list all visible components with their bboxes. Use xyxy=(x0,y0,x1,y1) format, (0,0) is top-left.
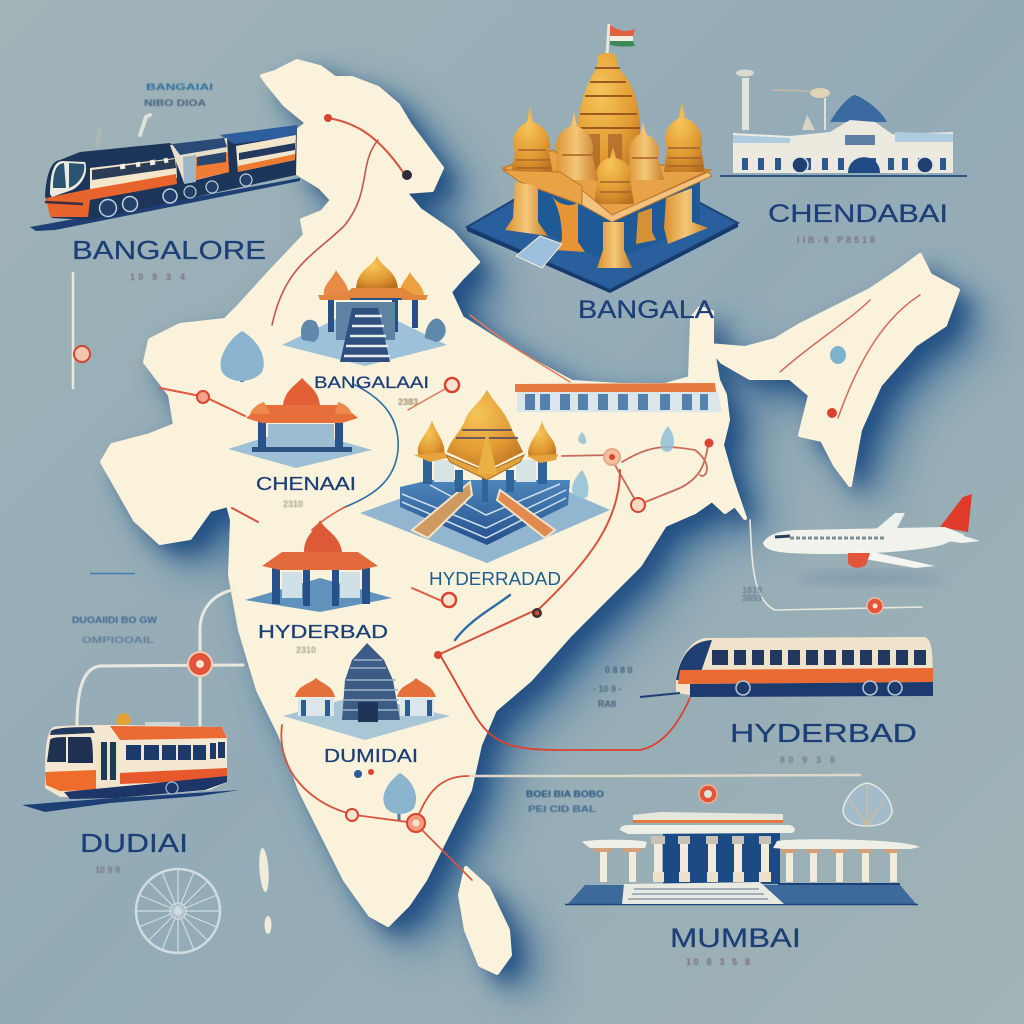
caption: left middle: DUOAIIDI BO GW xyxy=(72,615,158,625)
plane: 1819 xyxy=(742,585,762,595)
train: Hyderbad xyxy=(593,637,933,709)
plane xyxy=(742,494,980,603)
label: Chendabai: IIB-9 P8518 xyxy=(797,235,875,245)
steps xyxy=(622,882,784,904)
small trees xyxy=(572,426,674,498)
islands xyxy=(258,848,272,934)
side domes xyxy=(511,101,705,204)
tower xyxy=(742,78,749,130)
label: Hyderbad right: 80 9 3 8 xyxy=(780,755,835,765)
label: Chenaai: CHENAAI xyxy=(256,474,356,494)
building: Mumbai xyxy=(565,783,920,905)
train: Hyderbad: RAII xyxy=(598,699,616,709)
temple: Hyderabad central xyxy=(360,390,674,563)
caption: above Mumbai: PEI CID BAL xyxy=(528,804,597,814)
label: Chendabai: CHENDABAI xyxy=(768,200,948,228)
label: Chendabai xyxy=(768,200,948,245)
wall xyxy=(663,833,780,884)
light base xyxy=(360,488,610,563)
caption: above Mumbai: BOEI BIA BOBO xyxy=(526,789,604,799)
label: Bangalore xyxy=(72,82,266,282)
map: India mainland xyxy=(102,61,958,973)
temple: gold with flag xyxy=(467,24,738,293)
label: Bangalaai xyxy=(314,373,429,407)
wide map shadow xyxy=(132,87,988,999)
label: Dubai xyxy=(80,828,188,875)
central dome xyxy=(573,53,642,185)
label: Dubai: DUDIAI xyxy=(80,828,188,858)
temple: Hyderbad small xyxy=(245,520,392,612)
label: Dumidai: DUMIDAI xyxy=(324,746,418,766)
gold domes xyxy=(414,390,558,480)
wheel emblem xyxy=(136,869,220,953)
blue pyramid xyxy=(400,480,570,545)
label: Bangala: BANGALA xyxy=(578,296,714,324)
pavilions xyxy=(423,458,547,502)
tree xyxy=(221,331,264,382)
label: Hyderbad right: HYDERBAD xyxy=(730,718,917,748)
label: Bangalore: BANGALORE xyxy=(72,235,266,265)
temple stairs xyxy=(516,236,562,268)
label: Bangalore: NIBO DIOA xyxy=(144,98,207,108)
temple: Dumidai xyxy=(283,643,450,740)
tree: south xyxy=(354,769,416,820)
label: Bangalaai: 2383 xyxy=(398,397,418,407)
label: Chenaai: 2310 xyxy=(283,499,303,509)
temple: Chenaai xyxy=(228,378,372,468)
map shadow xyxy=(116,73,972,985)
label: Bangalaai: BANGALAAI xyxy=(314,373,429,392)
routes on the map xyxy=(160,118,920,880)
label: Mumbai: MUMBAI xyxy=(670,923,801,953)
roof platform xyxy=(503,150,710,217)
off-map connector lines xyxy=(73,273,922,725)
dark interior xyxy=(525,175,700,262)
train: Bangalore xyxy=(30,115,300,231)
label: Dubai: 10 9 8 xyxy=(95,865,120,875)
plane: 3893 xyxy=(742,593,762,603)
label: Hyderbad small: HYDERBAD xyxy=(258,621,388,642)
label: Bangalore: BANGAIAI xyxy=(146,82,213,92)
label: Hyderbad small: 2310 xyxy=(296,645,316,655)
caption: above Mumbai xyxy=(526,789,604,814)
train: Hyderbad: - 10 9 - xyxy=(593,684,622,694)
route pins xyxy=(74,114,883,832)
front gables xyxy=(503,170,582,205)
label: Mumbai: 10 8 3 5 8 xyxy=(686,957,750,967)
temple plinth xyxy=(467,150,738,290)
label: Mumbai xyxy=(670,923,801,967)
caption: left middle xyxy=(72,574,158,645)
station: Chendabai xyxy=(720,70,967,176)
station: top of map xyxy=(515,383,722,412)
label: Hyderabad central: HYDERRADAD xyxy=(429,568,561,589)
leaf emblem xyxy=(843,783,892,826)
wings xyxy=(582,839,920,884)
label: Chenaai xyxy=(256,474,356,509)
train: Hyderbad: 0 8 8 0 xyxy=(605,665,633,675)
roofs xyxy=(633,812,783,823)
columns xyxy=(651,836,771,882)
columns xyxy=(505,182,708,268)
ground xyxy=(567,885,917,905)
label: Bangalore: 10 9 3 4 xyxy=(130,272,185,282)
train: Dubai xyxy=(22,713,240,812)
caption: left middle: OMPIOOAIL xyxy=(82,635,155,645)
label: Hyderbad small xyxy=(258,621,388,655)
temple: Bangalaai xyxy=(221,256,447,382)
label: Hyderbad right xyxy=(730,718,917,765)
flag xyxy=(607,24,635,55)
